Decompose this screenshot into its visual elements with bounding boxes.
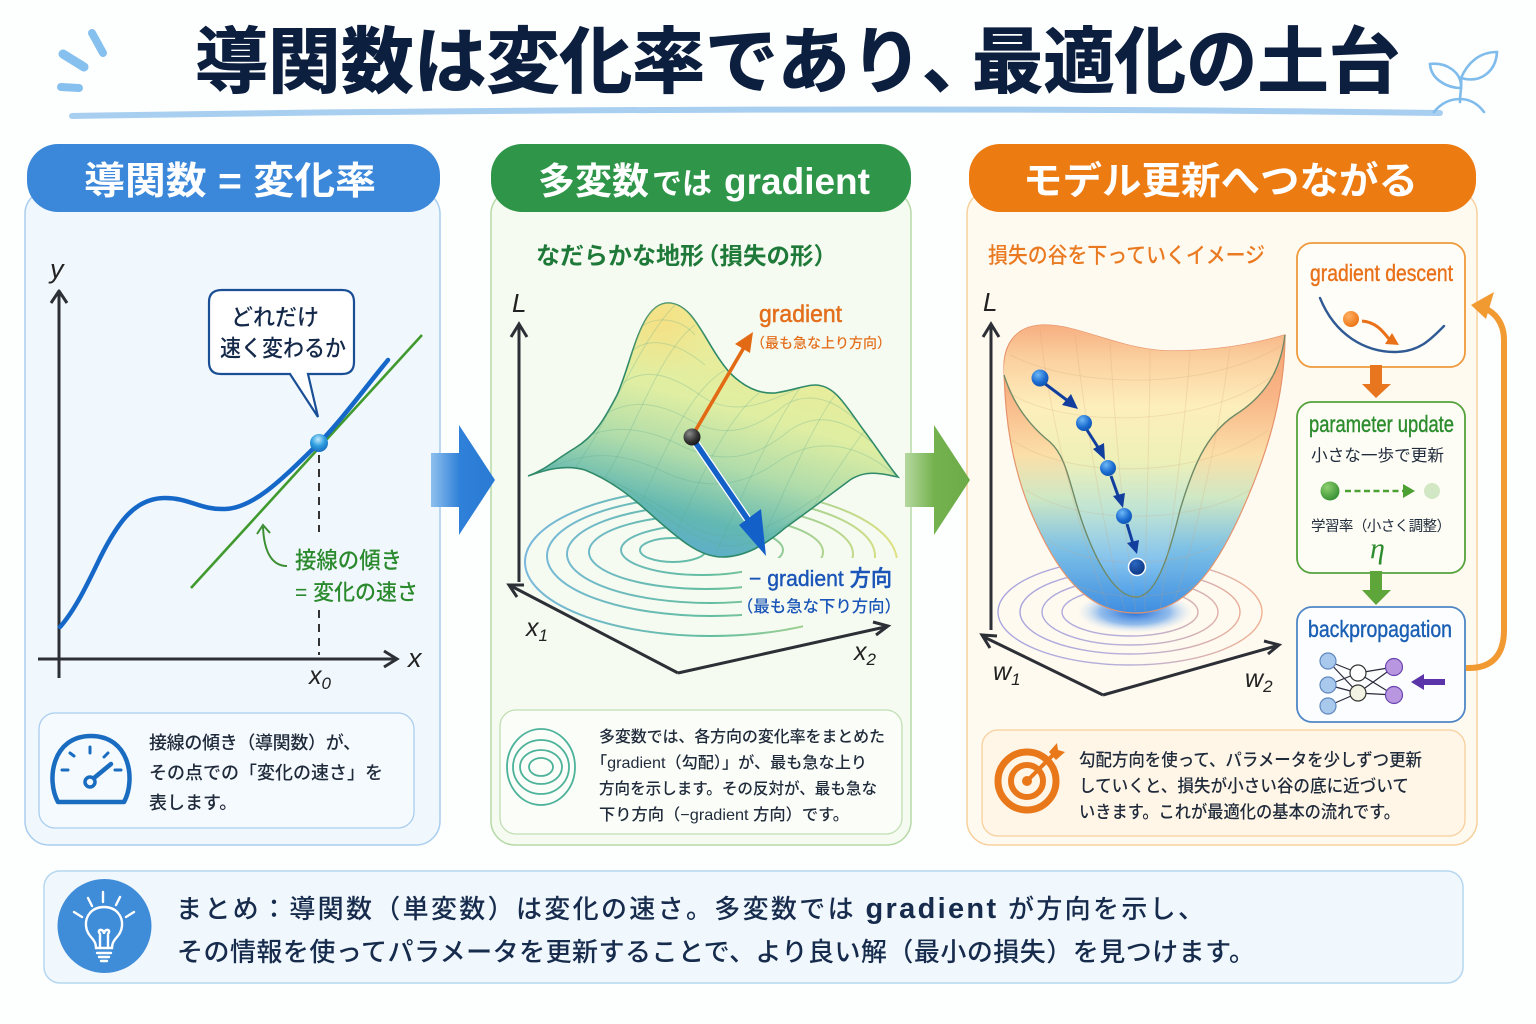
header: model update: モデル更新へつながる <box>1023 160 1418 203</box>
header: derivative: 導関数 = 変化率 <box>84 161 376 203</box>
chart: loss surface: 2 <box>866 650 876 669</box>
chart: loss valley: w <box>993 658 1011 686</box>
title: 、 <box>922 23 994 103</box>
header: gradient <box>491 144 911 212</box>
chart: loss surface: x <box>854 638 866 666</box>
caption: gradient: 方向を示します。その反対が、最も急な <box>599 779 877 798</box>
arrow: negative gradient <box>684 428 901 616</box>
panel: gradient <box>491 144 911 845</box>
caption: gradient: 多変数では、各方向の変化率をまとめた <box>599 728 885 746</box>
title: 最適化の土台 <box>972 23 1400 103</box>
caption: derivative <box>39 713 414 828</box>
header: gradient: gradient <box>724 161 870 202</box>
header: gradient: では <box>652 168 712 201</box>
arrow: gradient: （最も急な上り方向） <box>751 335 891 351</box>
panel: model update <box>967 144 1504 845</box>
subheading: terrain: （損失の形） <box>696 243 837 269</box>
icon: sprout <box>1430 52 1497 112</box>
box: parameter update: 学習率（小さく調整） <box>1311 518 1451 535</box>
panel: derivative <box>25 144 440 845</box>
caption: derivative: その点での「変化の速さ」を <box>149 763 383 783</box>
caption: model update <box>982 730 1465 836</box>
chart: loss valley: L <box>983 287 997 317</box>
arrow: feedback loop <box>1466 292 1504 668</box>
chart: loss valley: w <box>1245 665 1263 693</box>
box: backpropagation <box>1297 607 1465 722</box>
icon: target <box>998 743 1065 810</box>
icon: speedometer <box>52 736 130 802</box>
arrow: gradient: gradient <box>759 301 842 328</box>
header: model update <box>969 144 1476 212</box>
summary panel: まとめ：導関数（単変数）は変化の速さ。多変数では gradient が方向を示し、 <box>176 893 1204 925</box>
caption: model update: 勾配方向を使って、パラメータを少しずつ更新 <box>1079 750 1422 770</box>
arrow: to parameter update <box>1362 365 1391 398</box>
chart: tangent line: y <box>48 254 65 284</box>
title underline <box>72 109 1440 116</box>
chart: tangent line: x <box>406 643 423 673</box>
path: descent steps <box>1032 370 1146 576</box>
chart: loss valley: 2 <box>1262 677 1273 696</box>
box: gradient descent: gradient descent <box>1310 260 1454 286</box>
box: backpropagation: backpropagation <box>1308 616 1452 642</box>
summary panel: その情報を使ってパラメータを更新することで、より良い解（最小の損失）を見つけます。 <box>177 937 1255 967</box>
box: parameter update: η <box>1370 532 1385 565</box>
label: slope <box>257 525 418 605</box>
arrow: gradient <box>694 301 891 433</box>
subheading: terrain: なだらかな地形 <box>536 243 704 270</box>
callout: how fast <box>209 290 354 417</box>
chart: loss surface <box>509 280 902 673</box>
title: 導関数は変化率であり <box>195 23 923 103</box>
chart: tangent line: x <box>309 662 322 690</box>
chart: loss valley: 1 <box>1011 670 1021 689</box>
caption: model update: していくと、損失が小さい谷の底に近づいて <box>1079 776 1409 796</box>
chart: tangent line <box>38 254 423 693</box>
caption: gradient: 下り方向（−gradient 方向）です。 <box>599 806 849 824</box>
summary panel <box>44 871 1463 983</box>
chart: loss valley <box>982 287 1285 696</box>
arrow: green <box>905 425 970 535</box>
subheading: valley: 損失の谷を下っていくイメージ <box>988 243 1265 268</box>
title <box>195 23 1400 103</box>
icon: light bulb <box>58 879 152 973</box>
box: parameter update <box>1297 402 1465 573</box>
arrow: negative gradient: （最も急な下り方向） <box>737 598 901 616</box>
chart: loss surface: L <box>512 288 526 318</box>
decorative sparkle icon <box>61 33 103 88</box>
caption: derivative: 接線の傾き（導関数）が、 <box>149 732 361 753</box>
chart: loss surface: 1 <box>538 626 548 645</box>
arrow: negative gradient: − gradient 方向 <box>749 566 892 591</box>
chart: loss surface: x <box>526 614 538 642</box>
arrow: to backpropagation <box>1362 571 1391 605</box>
box: parameter update: parameter update <box>1309 411 1454 437</box>
icon: contour map <box>507 729 575 805</box>
box: parameter update: 小さな一歩で更新 <box>1311 446 1444 465</box>
label: slope: = 変化の速さ <box>295 580 418 605</box>
caption: gradient <box>500 710 902 834</box>
box: gradient descent <box>1297 243 1465 367</box>
chart: tangent line: 0 <box>322 674 332 693</box>
label: slope: 接線の傾き <box>295 547 402 573</box>
callout: how fast: 速く変わるか <box>220 335 346 361</box>
arrow: blue <box>431 425 495 535</box>
header: derivative <box>27 144 440 212</box>
header: gradient: 多変数 <box>538 161 649 202</box>
caption: derivative: 表します。 <box>149 793 237 813</box>
callout: how fast: どれだけ <box>231 304 319 330</box>
caption: model update: いきます。これが最適化の基本の流れです。 <box>1079 802 1400 822</box>
caption: gradient: 「gradient（勾配）」が、最も急な上り <box>591 753 867 772</box>
